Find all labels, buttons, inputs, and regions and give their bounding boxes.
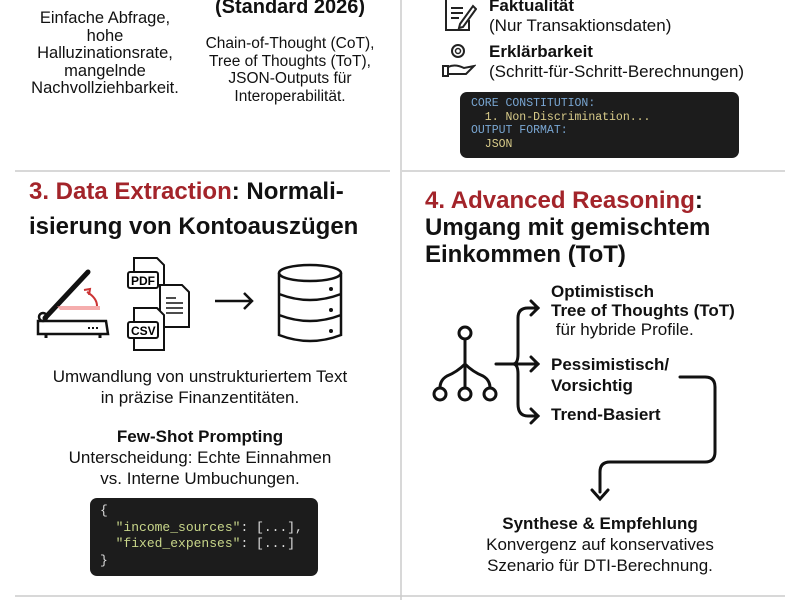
text: conversion description: Umwandlung von unstrukturiertem Text	[53, 367, 347, 386]
text: standard 2026 techniques: Tree of Thoughts (ToT),	[209, 52, 371, 70]
text: Faktualitaet	[489, 0, 671, 35]
text: pessimistic branch	[551, 355, 669, 395]
icon: scanner and files to database	[36, 257, 342, 351]
text: branch labels: Tree of Thoughts (ToT)	[551, 301, 735, 320]
text: conversion description	[53, 367, 348, 407]
heading: section 4	[425, 187, 710, 268]
text: few-shot prompting: Unterscheidung: Echte Einnahmen	[69, 448, 331, 467]
text: few-shot prompting: vs. Interne Umbuchungen.	[100, 469, 300, 488]
text: Erklaerbarkeit	[489, 42, 744, 81]
text: trend branch: Trend-Basiert	[551, 405, 661, 424]
code box: json: "income_sources": [...],	[116, 520, 303, 534]
text: standard 2026 techniques: JSON-Outputs für	[228, 70, 352, 87]
text: conversion description: in präzise Finanzentitäten.	[101, 388, 299, 407]
text: pessimistic branch: Pessimistisch/	[551, 355, 669, 374]
text: pessimistic branch: Vorsichtig	[551, 376, 633, 395]
diagram: tree of thoughts branches	[432, 299, 716, 502]
icon: scanner and files to database: CSV	[131, 324, 156, 338]
code box: json: }	[100, 552, 108, 568]
code box: core constitution: 1. Non-Discrimination...	[485, 110, 650, 124]
text: simple query drawbacks: hohe	[87, 26, 123, 44]
icon: gear hand	[442, 44, 476, 77]
code box: core constitution	[460, 92, 739, 158]
text: simple query drawbacks: Nachvollziehbarkeit.	[31, 79, 179, 97]
text: simple query drawbacks: Einfache Abfrage,	[40, 9, 170, 27]
text: branch labels: für hybride Profile.	[556, 320, 694, 339]
text: Erklaerbarkeit: (Schritt-für-Schritt-Berechnungen)	[489, 62, 744, 81]
code box: json: {	[100, 503, 108, 518]
text: Erklaerbarkeit: Erklärbarkeit	[489, 42, 593, 61]
text: simple query drawbacks	[31, 9, 179, 97]
text: branch labels: Optimistisch	[551, 282, 654, 301]
heading: section 4: Umgang mit gemischtem	[425, 214, 710, 241]
icon: document pen	[445, 0, 477, 31]
text: synthesis	[486, 514, 714, 575]
code box: core constitution: CORE CONSTITUTION:	[471, 97, 595, 110]
text: synthesis: Konvergenz auf konservatives	[486, 535, 714, 554]
code box: core constitution: OUTPUT FORMAT:	[471, 124, 568, 137]
code box: json: "fixed_expenses": [...]	[116, 536, 295, 551]
text: few-shot prompting	[69, 427, 331, 488]
heading: section 4: Einkommen (ToT)	[425, 241, 626, 268]
text: simple query drawbacks: Halluzinationsrate,	[37, 44, 173, 62]
heading: section 3: isierung von Kontoauszügen	[29, 213, 358, 240]
heading: section 3: 3. Data Extraction: Normali-	[29, 178, 344, 205]
text: standard 2026 techniques: Interoperabilität.	[234, 88, 346, 104]
text: standard 2026 techniques	[206, 35, 374, 104]
heading: section 4: 4. Advanced Reasoning:	[425, 187, 703, 214]
icon: scanner and files to database: PDF	[131, 274, 155, 288]
text: simple query drawbacks: mangelnde	[64, 62, 146, 80]
text: branch labels	[551, 282, 735, 339]
text: few-shot prompting: Few-Shot Prompting	[117, 427, 283, 446]
code box: core constitution: JSON	[485, 138, 512, 150]
text: standard 2026 techniques: Chain-of-Thought (CoT),	[206, 35, 374, 52]
text: Faktualitaet: (Nur Transaktionsdaten)	[489, 16, 671, 35]
heading: section 3	[29, 178, 358, 240]
text: synthesis: Szenario für DTI-Berechnung.	[487, 556, 713, 575]
text: synthesis: Synthese & Empfehlung	[502, 514, 698, 533]
code box: json	[90, 498, 318, 576]
